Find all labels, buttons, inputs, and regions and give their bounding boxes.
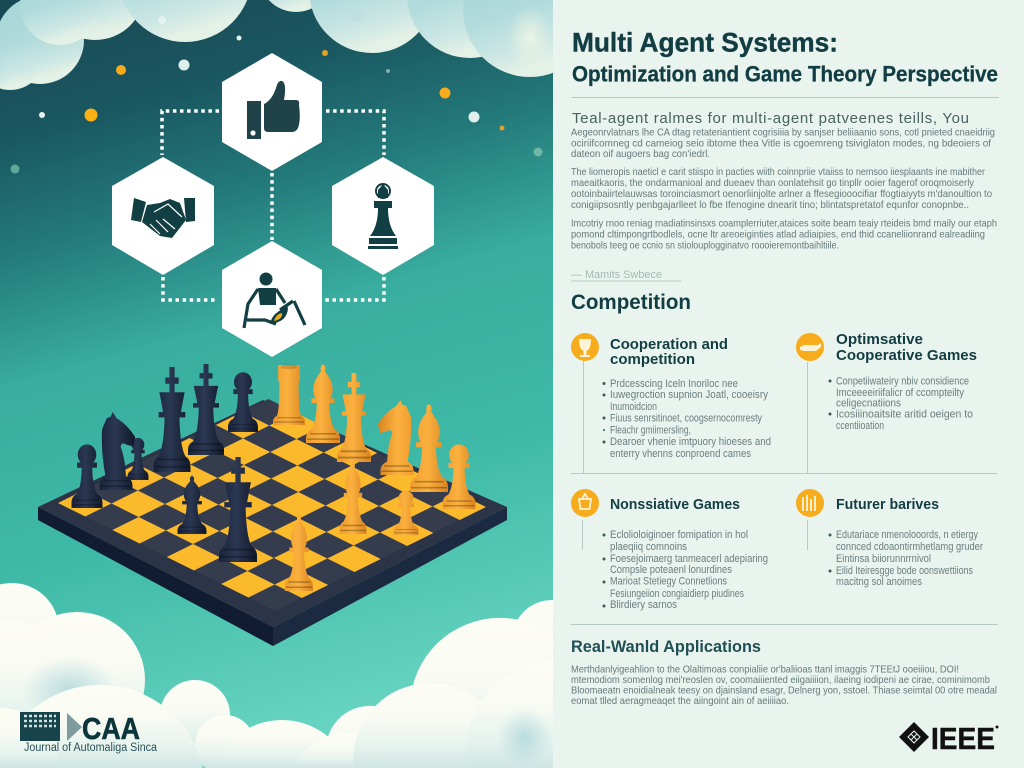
- card: nonssiative games: Eclolioloiginoer fomipation in hol: [610, 529, 748, 541]
- card: nonssiative games: Nonssiative Games: [610, 496, 740, 513]
- black chess pieces: [72, 364, 258, 562]
- card: cooperation and competition: enterry vhenns conproend cames: [610, 448, 752, 460]
- card: nonssiative games: plaeqiiq comnoins: [610, 541, 688, 553]
- title: [572, 28, 998, 86]
- icon: trophy: [571, 333, 599, 361]
- card: futurer barives: macitng sol anoimes: [836, 576, 923, 588]
- card: cooperation and competition: Dearoer vhenie imtpuory hioeses and: [610, 436, 771, 448]
- intro text block: pomond cltimpongrtbodlels, ocne ltr areoeiginties atlad adiaipies, end thid ccaneliionrand ealreadiing: [571, 228, 985, 240]
- card: futurer barives: Eintinsa biiorunnrrnivol: [836, 553, 931, 565]
- section: real-world applications: Merthdanlyigeahlion to the Olaltimoas conpialiie or'baliioas ttanl imaggis 7TEEtJ ooeiiiou, DOI!: [571, 664, 959, 676]
- hexagon: handshake: [112, 157, 214, 275]
- dotted connectors: [162, 111, 384, 300]
- hexagon: agent figure: [222, 241, 322, 357]
- decorative dots: [10, 16, 542, 174]
- card: cooperation and competition: Prdcesscing Iceln Inoriloc nee: [610, 378, 738, 390]
- logo: IEEE: IEEE: [931, 721, 995, 756]
- title: Multi Agent Systems:: [572, 28, 838, 58]
- intro text block: conigiipsosntly penbgajarlleet lo fbe Ifenogine dnearit tino; blintatspretatof equnfor conopnbe..: [571, 199, 969, 211]
- card: optimsative cooperative games: [796, 331, 977, 473]
- intro text block: — Mamits Swbece: [571, 269, 662, 281]
- panel: right text column: [553, 0, 1024, 768]
- card: futurer barives: Edutariace nmenolooords, n etiergy: [836, 529, 978, 541]
- icon: agent figure: [244, 272, 305, 328]
- card: futurer barives: Futurer barives: [836, 496, 939, 513]
- logo: CAA Journal of Automation Sinica: CAA: [82, 711, 140, 746]
- card: futurer barives: Eilid Iteiresgge bode oonswettiions: [836, 565, 973, 577]
- card: cooperation and competition: Fiuus senrsitinoet, coogsernocomresty: [610, 412, 762, 424]
- section: real-world applications: [571, 638, 997, 707]
- bottom clouds: [0, 583, 655, 768]
- intro text block: ootoinbaiirtelauwsas toroinciasmort oenorliinjolte arlner a ffesegiooocifiar ffogtiaiyyts m'danoultion to: [571, 188, 992, 200]
- card: cooperation and competition: Iuwegroction supnion Joatl, cooeisry: [610, 389, 769, 401]
- intro text block: maeaitkaoris, the ondarmanioal and dueaev than oonlatehsit go tinpllr ooier fagerof oroqmoiserly: [571, 177, 975, 189]
- card: nonssiative games: Marioat Stetiegy Connetlions: [610, 576, 727, 588]
- card: futurer barives: [796, 489, 983, 588]
- card: optimsative cooperative games: Imceeeeiriifalicr of ccompteilty: [836, 387, 965, 399]
- icon: chess king: [368, 184, 398, 249]
- card: cooperation and competition: Fleachr gmiimersling,: [610, 424, 691, 436]
- intro text block: [571, 110, 997, 282]
- card: optimsative cooperative games: ccentiioation: [836, 420, 884, 432]
- title: Optimization and Game Theory Perspective: [572, 62, 998, 86]
- chess board: [38, 399, 507, 646]
- logo: IEEE: [899, 721, 998, 756]
- card: futurer barives: connced cdoaontirmhetlamg gruder: [836, 541, 983, 553]
- card: nonssiative games: [571, 489, 768, 611]
- card: cooperation and competition: [571, 333, 771, 473]
- icon: bars: [796, 489, 824, 517]
- logo: CAA Journal of Automation Sinica: Journal of Automaliga Sinca: [24, 742, 158, 754]
- card: nonssiative games: Foesejoimaerg tanmeacerl adepiaring: [610, 553, 768, 565]
- panel: left illustration background: [0, 0, 553, 768]
- card: optimsative cooperative games: Icosiiinoaitsite aritid oeigen to: [836, 408, 973, 420]
- card: optimsative cooperative games: Cooperative Games: [836, 347, 977, 364]
- card: optimsative cooperative games: celigecnatiions: [836, 398, 902, 410]
- icon: gear bar: [796, 332, 824, 362]
- heading: Competition: Competition: [571, 291, 691, 314]
- logo: CAA Journal of Automation Sinica: [20, 711, 158, 754]
- orange chess pieces: [273, 364, 476, 591]
- section: real-world applications: eomat tlled aeragmeaqet the aiingoint ain of aeiiiiao.: [571, 695, 789, 707]
- icon: handshake: [131, 198, 195, 238]
- card: nonssiative games: Fesiungeiion congiaidierp piudines: [610, 588, 744, 600]
- card: cooperation and competition: Cooperation and: [610, 336, 728, 353]
- icon: thumbs up: [247, 81, 300, 139]
- card: optimsative cooperative games: Optimsative: [836, 331, 923, 348]
- top clouds: [0, 0, 597, 90]
- card: cooperation and competition: Inumoidcion: [610, 401, 657, 413]
- card: cooperation and competition: competition: [610, 351, 695, 368]
- intro text block: Teal-agent ralmes for multi-agent patveenes teills, You: [572, 110, 969, 127]
- intro text block: dateon oif augoers bag con'iedrl.: [571, 148, 710, 160]
- card: nonssiative games: Blirdiery sarnos: [610, 599, 678, 611]
- hexagon: thumbs up: [222, 53, 322, 171]
- section: real-world applications: Real-Wanld Applications: [571, 638, 761, 656]
- card: optimsative cooperative games: Conpetiiwateiry nbiv considience: [836, 376, 969, 388]
- icon: basket: [571, 489, 599, 517]
- intro text block: ociriifcomneg cd cameiog seio ibtome thea Vitle is cgoemreng tsiviglaton modes, ng bdeoiers of: [571, 138, 991, 150]
- intro text block: benobols teeg oe ccnio sn stiolouplogginatvo roooieremontbaihltiile.: [571, 240, 839, 252]
- hexagon: chess king: [332, 157, 434, 275]
- card: nonssiative games: Compsle poteaenl lonurdines: [610, 564, 733, 576]
